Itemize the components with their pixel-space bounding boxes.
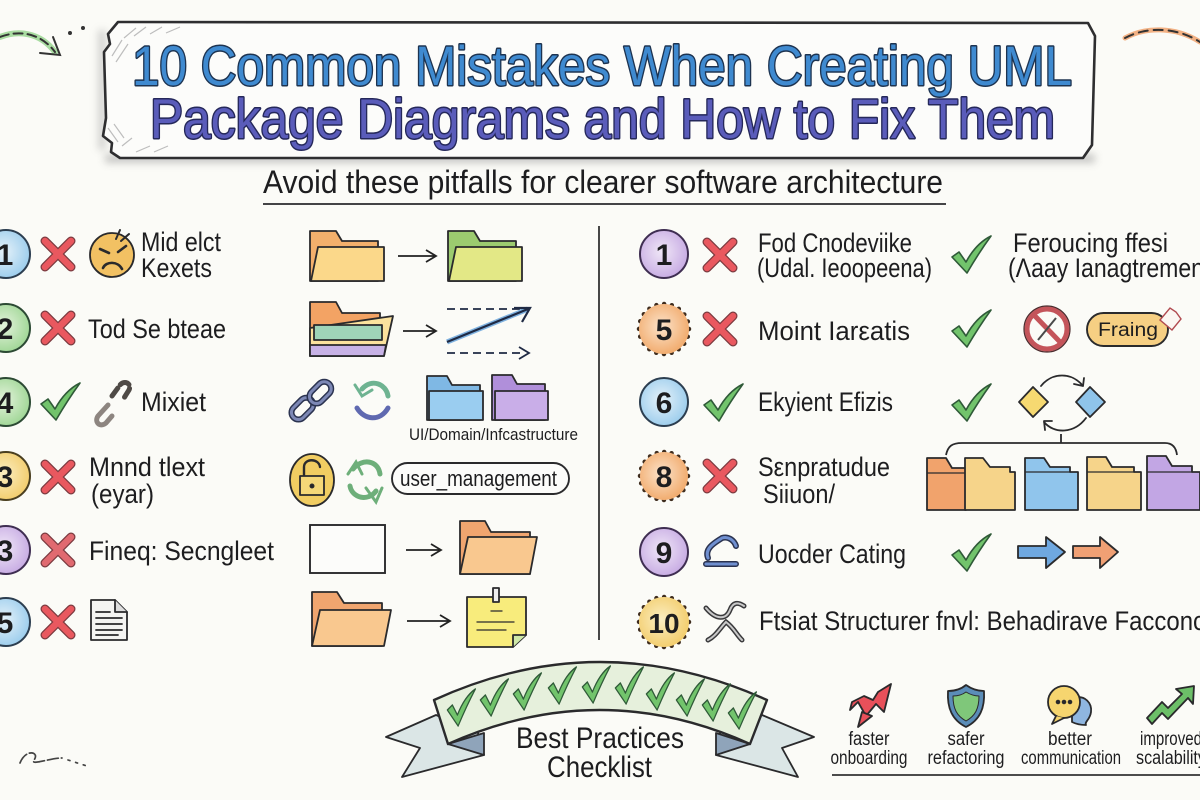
mistake text: Fineq: Secngleet <box>89 536 274 566</box>
badge 1: 1 <box>656 239 672 272</box>
icon: red cross <box>45 241 71 267</box>
empty box <box>310 525 385 573</box>
row 2 <box>639 304 1181 354</box>
divider <box>598 226 600 640</box>
badge 4 <box>0 378 30 426</box>
label <box>1136 729 1200 769</box>
badge 2 <box>0 304 30 352</box>
icon: sync arrows <box>348 462 382 502</box>
icon: blue folder <box>1025 458 1078 510</box>
mistake text: Mnnd tlext <box>89 452 205 482</box>
ribbon left tail <box>386 715 484 777</box>
label: better <box>1048 729 1093 750</box>
icon: green check <box>952 534 991 571</box>
icon: red cross <box>45 537 71 563</box>
icon: sync arrows <box>355 383 388 418</box>
row 6 <box>639 597 1200 647</box>
icon: red cross <box>45 464 71 490</box>
badge 5 scalloped <box>639 304 689 354</box>
icon: blue hook <box>706 537 736 564</box>
checklist marks <box>447 666 756 729</box>
row 3 <box>640 376 1105 431</box>
icon: orange folder <box>927 458 966 510</box>
badge 6: 6 <box>656 387 672 420</box>
title banner <box>98 22 1095 163</box>
mistake text <box>757 228 932 283</box>
mistake text: (eyar) <box>91 479 154 509</box>
row 2 <box>0 302 530 359</box>
ribbon right tail <box>716 715 814 777</box>
badge 6 <box>640 378 688 426</box>
best practices ribbon <box>386 662 814 784</box>
title box <box>103 22 1095 158</box>
label: refactoring <box>928 748 1004 769</box>
label <box>928 729 1004 769</box>
mistake text: Siiuon/ <box>763 479 835 509</box>
icon: yellow folder <box>1087 457 1141 510</box>
icon: stuffed folder <box>310 302 393 356</box>
mistake text: (Udal. Ieoopeena) <box>757 253 932 283</box>
mistake text <box>141 227 221 283</box>
arrow <box>407 615 450 627</box>
pill: fraing: Fraing <box>1098 320 1158 341</box>
icon: red cross <box>707 463 733 489</box>
icon: chat bubbles <box>1048 686 1091 725</box>
icon: purple folder <box>1147 456 1200 510</box>
icon: frustrated face <box>90 230 134 277</box>
checklist label: Checklist <box>547 751 653 784</box>
mistake text: Mixiet <box>141 387 206 417</box>
icon: prohibition sign <box>1024 306 1070 352</box>
icon: red cross <box>707 242 733 268</box>
badge 10 scalloped <box>639 597 689 647</box>
row 4 <box>0 452 569 509</box>
mistake text: Fod Cnodeviike <box>758 228 912 258</box>
icon: red cross <box>45 315 71 341</box>
folder row <box>927 456 1200 510</box>
badge 9: 9 <box>656 537 672 570</box>
icon: orange folder <box>312 592 391 646</box>
icon: blue arrow <box>1018 537 1065 568</box>
mistake text: Ekyient Efizis <box>758 387 893 417</box>
checklist label: Best Practices <box>516 722 684 755</box>
icon: shield <box>948 685 984 727</box>
doodle: green arrow top left <box>0 27 84 55</box>
icon: rising arrow <box>1147 686 1194 724</box>
arrow <box>406 544 441 556</box>
icon: yellow folder <box>965 458 1015 510</box>
mistake text <box>89 452 205 509</box>
arrow <box>398 250 436 262</box>
checklist label <box>516 722 684 784</box>
row 6 <box>0 588 526 647</box>
mistake text: Tod Se bteae <box>88 314 226 344</box>
icon: red cross <box>707 316 733 342</box>
icon: orange folder <box>310 231 384 281</box>
icon: chain link <box>289 379 334 422</box>
mistake text: Kexets <box>141 253 212 283</box>
label: communication <box>1021 748 1121 769</box>
label: onboarding <box>830 748 908 769</box>
row 5 <box>640 528 1118 576</box>
benefit: improved scalability <box>1136 686 1200 769</box>
badge 1 <box>640 230 688 278</box>
badge 1 <box>0 230 30 278</box>
icon: green check <box>704 384 743 421</box>
icon: diamond cycle <box>1019 376 1105 431</box>
folder caption: UI/Domain/Infcastructure <box>409 425 578 444</box>
badge 3 <box>0 452 30 500</box>
subtitle: Avoid these pitfalls for clearer software architecture <box>263 164 943 200</box>
fix text <box>1008 228 1200 283</box>
icon: rocket <box>850 684 891 727</box>
icon: green folder <box>448 231 522 281</box>
row 3 <box>0 375 578 444</box>
mistake text: Moint Iarεatis <box>758 316 910 346</box>
icon: sticky note <box>467 588 526 647</box>
arrow <box>403 325 436 337</box>
icon: dashed arrows <box>447 308 530 359</box>
icon: tangled lines <box>706 603 744 640</box>
icon: red cross <box>45 609 71 635</box>
icon: green check <box>41 383 80 420</box>
icon: green check <box>952 310 991 347</box>
mistake text: Mid elct <box>141 227 221 257</box>
badge 10 scalloped: 10 <box>648 608 680 639</box>
benefit: safer refactoring <box>928 685 1004 769</box>
badge 9 <box>640 528 688 576</box>
icon: green check <box>952 236 991 273</box>
mistake text <box>758 452 890 509</box>
icon: broken chain <box>97 383 130 425</box>
mistake text: Uocder Cating <box>758 539 906 569</box>
panel: left column <box>0 227 578 647</box>
benefits strip <box>830 684 1200 775</box>
mistake text: Sεnpratudue <box>758 452 890 482</box>
badge 5 scalloped: 5 <box>656 314 672 347</box>
title line 1: 10 Common Mistakes When Creating UML <box>132 34 1072 97</box>
fix text: Feroucing ffesi <box>1013 228 1168 258</box>
badge 8 scalloped <box>640 452 688 500</box>
doodle: orange dashes top right <box>1125 30 1200 42</box>
icon: blue folder <box>427 376 483 420</box>
pill: fraing <box>1087 308 1181 346</box>
row 1 <box>640 228 1200 283</box>
icon: orange arrow <box>1073 537 1118 568</box>
title line 2: Package Diagrams and How to Fix Them <box>150 87 1055 150</box>
icon: orange folder <box>460 521 537 574</box>
icon: document <box>91 600 127 640</box>
icon: purple folder <box>492 375 548 420</box>
icon: open lock <box>290 454 334 506</box>
label <box>1021 729 1121 769</box>
row 1 <box>0 227 522 283</box>
badge 5 <box>0 598 30 646</box>
icon: green check <box>952 384 991 421</box>
benefit: better communication <box>1021 686 1121 769</box>
ribbon arch <box>434 662 767 744</box>
label: safer <box>948 729 985 750</box>
label <box>830 729 908 769</box>
label: faster <box>848 729 890 750</box>
badge 8 scalloped: 8 <box>656 461 672 494</box>
benefit: faster onboarding <box>830 684 908 769</box>
badge 3 purple <box>0 526 30 574</box>
panel: right column <box>639 228 1200 647</box>
row 4 <box>640 434 1200 510</box>
row 5 <box>0 521 537 574</box>
pill: user_management: user_management <box>400 466 557 491</box>
bracket <box>946 434 1177 455</box>
doodle: bottom left squiggle <box>20 753 90 767</box>
